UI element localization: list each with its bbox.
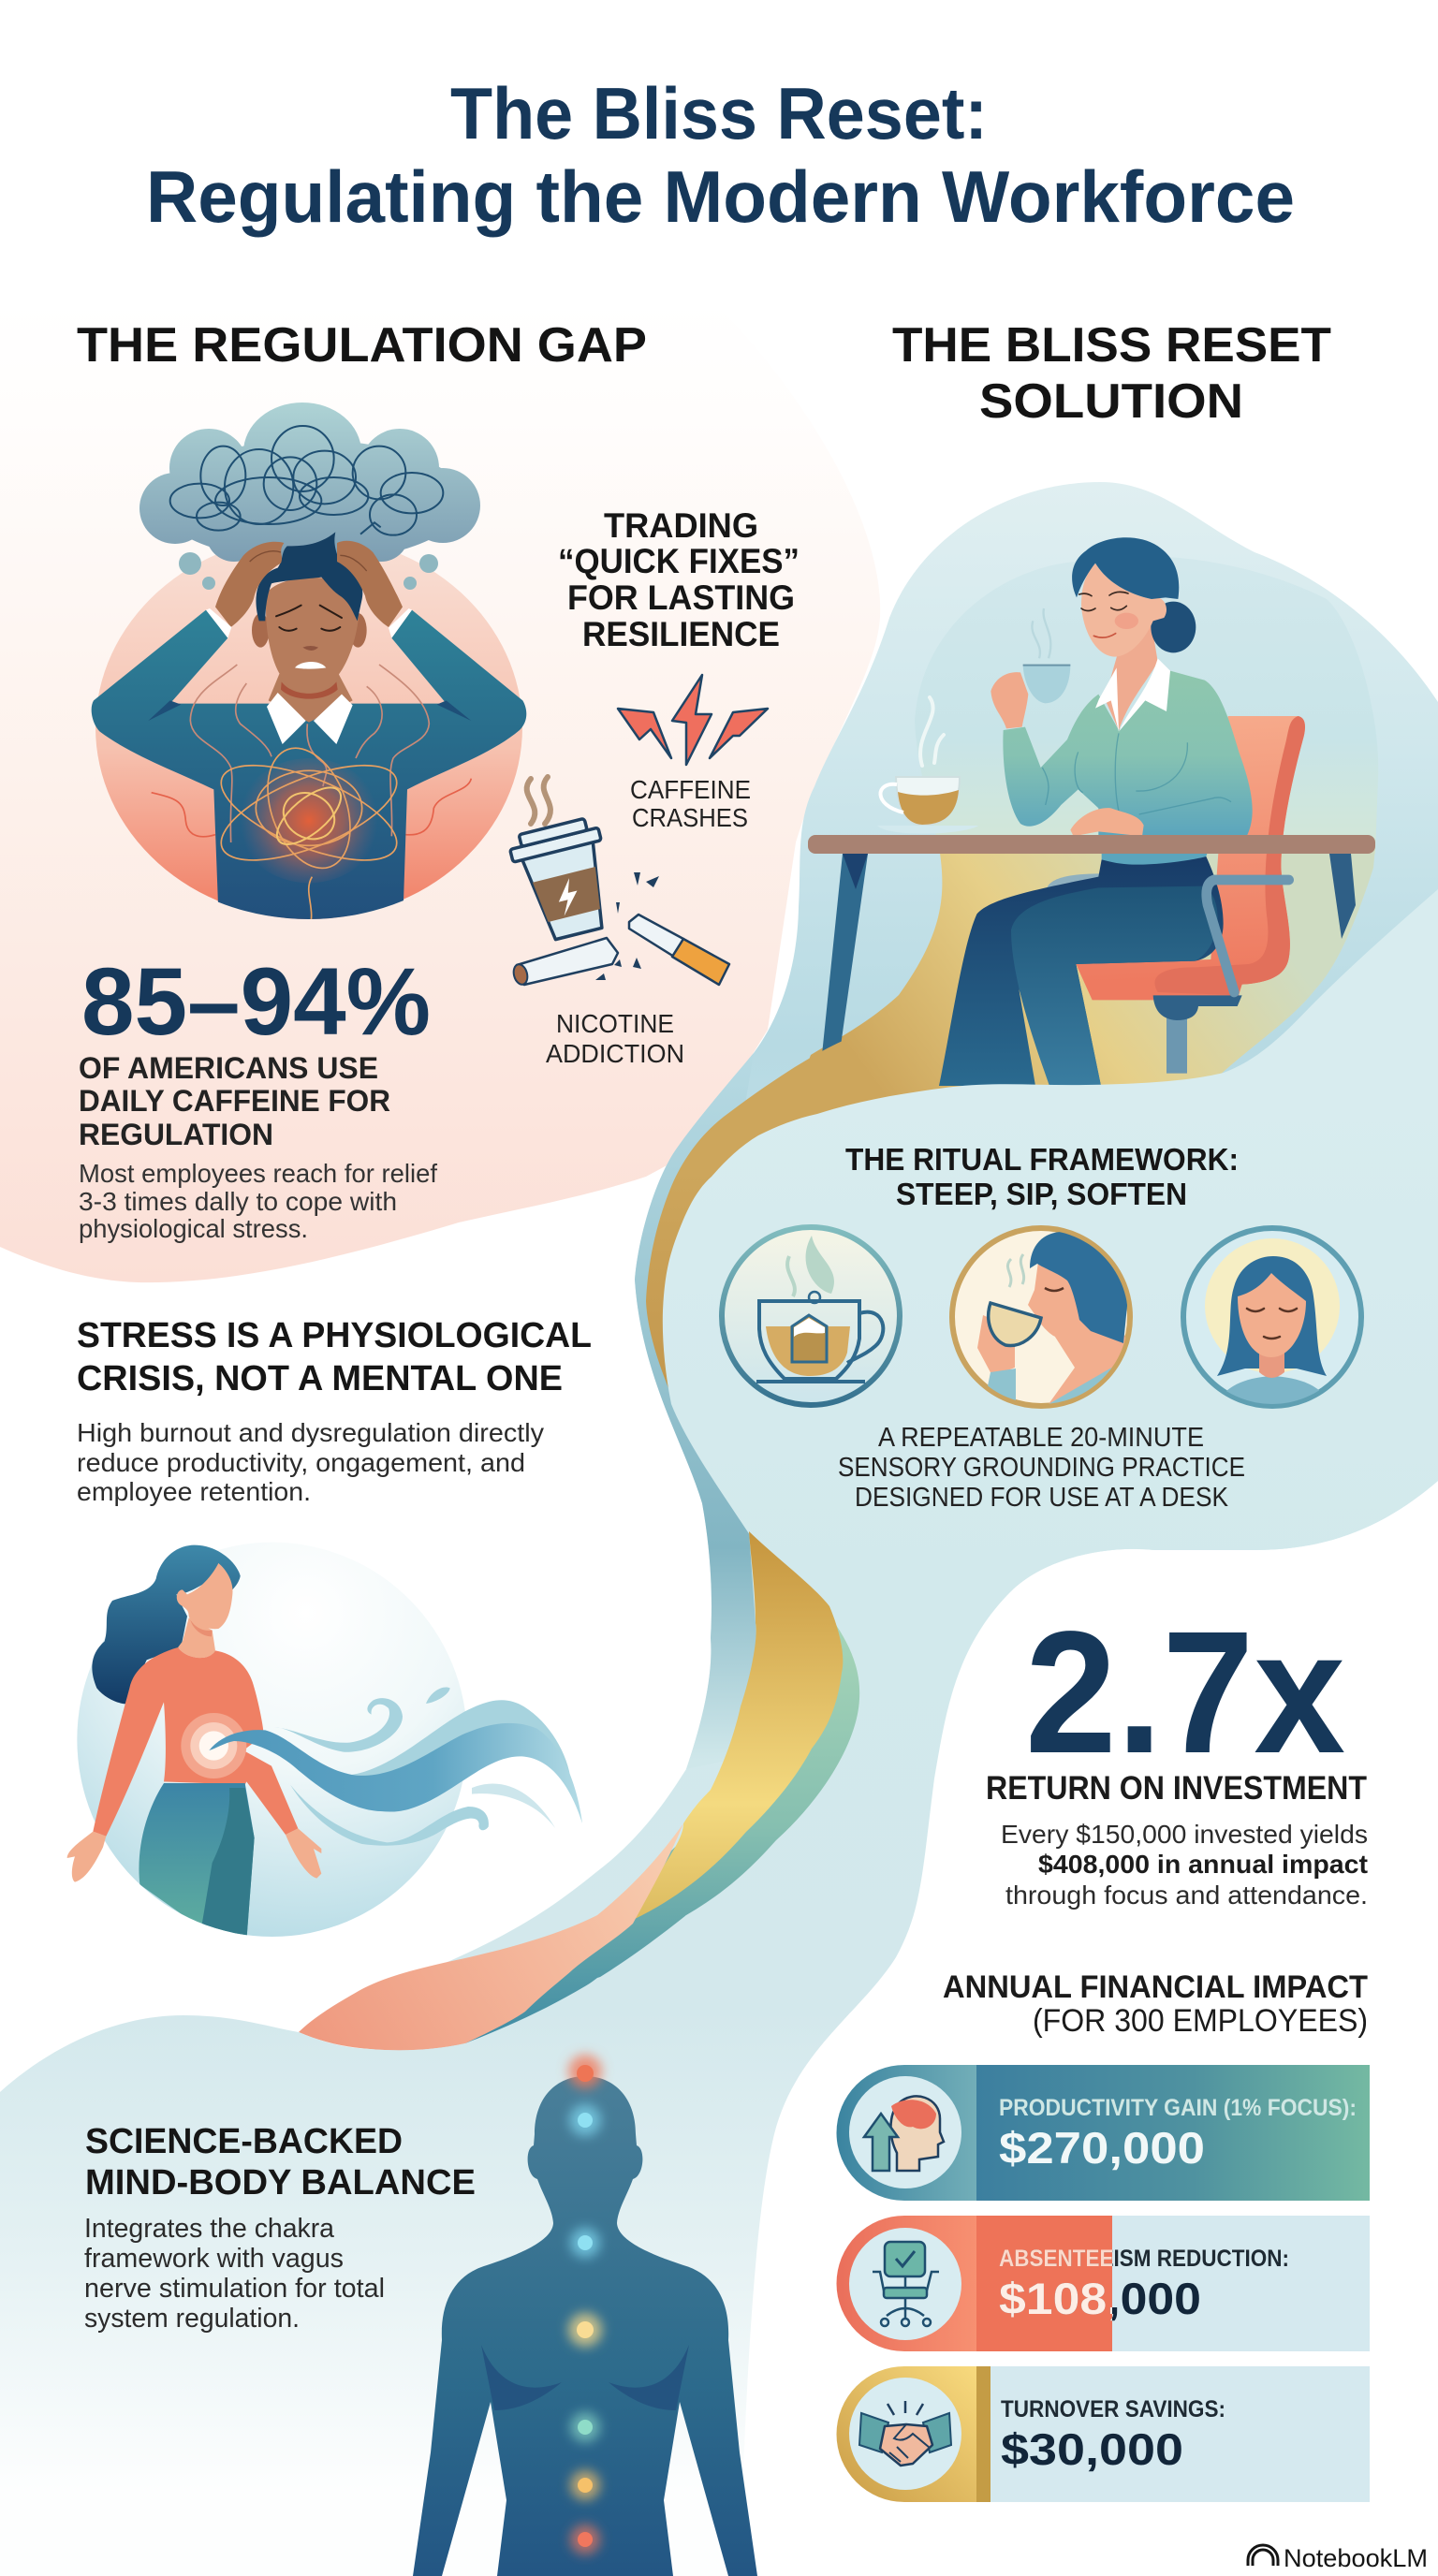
text: trading quick fixes — [558, 506, 800, 653]
body text: chakra: Integrates the chakra — [84, 2214, 335, 2244]
panel: peach regulation gap background — [0, 300, 880, 1282]
body text: chakra: nerve stimulation for total — [84, 2274, 385, 2304]
stat body text — [79, 1159, 437, 1243]
text: trading quick fixes: “QUICK FIXES” — [558, 542, 800, 580]
blouse — [1003, 671, 1253, 836]
icon: head and arrow — [849, 2076, 961, 2188]
chest shading — [481, 2345, 689, 2410]
illustration: woman enjoying tea at desk — [749, 537, 1378, 1217]
text: repeatable practice: SENSORY GROUNDING PRACTICE — [838, 1453, 1245, 1483]
body text: chakra: system regulation. — [84, 2304, 300, 2334]
title: The Bliss Reset: — [450, 72, 988, 154]
icon: sip woman profile — [952, 1228, 1133, 1413]
heading: annual financial impact: (FOR 300 EMPLOYEES) — [1033, 2003, 1368, 2039]
ribbon: gold lower — [633, 1531, 843, 1920]
neck — [1105, 624, 1158, 730]
label and value: PRODUCTIVITY GAIN (1% FOCUS): — [999, 2095, 1357, 2121]
chair — [1047, 716, 1305, 1074]
heading: annual financial impact — [943, 1969, 1368, 2039]
heading: the bliss reset solution: SOLUTION — [979, 374, 1243, 429]
facial features — [276, 606, 342, 631]
label: nicotine addiction: NICOTINE — [556, 1009, 674, 1038]
stat body text: Most employees reach for relief — [79, 1159, 437, 1188]
blouse details — [1042, 733, 1231, 814]
bar: turnover savings: $30,000 — [1001, 2424, 1183, 2474]
heading: stress is a physiological crisis: STRESS IS A PHYSIOLOGICAL — [77, 1316, 592, 1355]
panel: ritual framework background — [663, 889, 1438, 1676]
illustration: body silhouette with chakras — [413, 2055, 757, 2576]
ribbon: peach — [299, 1823, 683, 2050]
hair — [92, 1545, 241, 1704]
cloud — [139, 402, 480, 562]
hair — [1030, 1232, 1127, 1343]
held hand — [990, 672, 1028, 728]
logo: NotebookLM: NotebookLM — [1284, 2544, 1428, 2572]
chakra points — [577, 2065, 594, 2547]
face — [1081, 564, 1167, 657]
text: trading quick fixes: RESILIENCE — [582, 615, 780, 653]
illustration: woman breathing — [67, 1543, 582, 1940]
text: repeatable practice: A REPEATABLE 20-MINUTE — [878, 1423, 1204, 1453]
collar — [1095, 658, 1170, 732]
icon: soften woman portrait — [1183, 1228, 1361, 1423]
label: nicotine addiction: ADDICTION — [546, 1039, 684, 1068]
bar: absenteeism reduction: ABSENTEEISM REDUCTION: — [999, 2246, 1289, 2272]
heading: stress is a physiological crisis: CRISIS, NOT A MENTAL ONE — [77, 1359, 563, 1398]
icon: handshake — [849, 2378, 961, 2490]
river: upper gold band — [646, 1041, 843, 1488]
hair — [256, 532, 362, 621]
body text: chakra: framework with vagus — [84, 2244, 344, 2274]
desk legs — [815, 854, 1356, 1119]
heading: ritual framework: STEEP, SIP, SOFTEN — [896, 1177, 1187, 1211]
neck — [178, 1617, 215, 1658]
stat caption: DAILY CAFFEINE FOR — [79, 1084, 390, 1118]
facial details — [1079, 592, 1128, 610]
heading: stress is a physiological crisis — [77, 1316, 592, 1398]
top and arms — [93, 1647, 298, 1837]
bar: productivity gain — [837, 2065, 1370, 2201]
red lines behind — [152, 779, 471, 837]
face — [177, 1563, 233, 1629]
body text: burnout: reduce productivity, ongagement, and — [77, 1448, 525, 1477]
thought bubbles — [179, 552, 438, 590]
stat: 85-94 percent: 85–94% — [81, 948, 431, 1055]
seated woman figure — [939, 537, 1305, 1086]
body text: roi: through focus and attendance. — [1005, 1881, 1368, 1910]
heading: ritual framework — [845, 1142, 1239, 1211]
bar: absenteeism reduction — [837, 2216, 1370, 2351]
ribbon: green teal — [465, 1608, 859, 2043]
neck and shoulder — [1049, 1331, 1125, 1404]
label and value: ABSENTEEISM REDUCTION: — [999, 2246, 1289, 2272]
hair — [1072, 537, 1179, 599]
scene background blob — [915, 556, 1378, 854]
icon: steep tea cup — [722, 1227, 900, 1405]
hand and sleeve — [977, 1315, 1015, 1376]
icon: caffeine crash bolts — [618, 675, 768, 765]
steam — [1032, 608, 1050, 658]
silhouette — [413, 2076, 757, 2576]
background circle — [77, 1543, 467, 1937]
label: nicotine addiction — [546, 1009, 684, 1068]
cuffs — [206, 608, 412, 638]
icon: broken cigarette — [511, 872, 729, 986]
stat caption: OF AMERICANS USE — [79, 1051, 378, 1085]
blouse below desk — [1102, 852, 1208, 865]
label: caffeine crashes: CRASHES — [632, 803, 748, 832]
ears — [252, 613, 270, 648]
bun — [1151, 602, 1196, 652]
text: repeatable practice: DESIGNED FOR USE AT A DESK — [855, 1483, 1229, 1513]
desk hand — [1070, 808, 1144, 836]
body text: roi: $408,000 in annual impact — [1038, 1850, 1368, 1879]
heading: return on investment: RETURN ON INVESTMENT — [986, 1770, 1367, 1807]
heading: annual financial impact: ANNUAL FINANCIAL IMPACT — [943, 1969, 1368, 2005]
heading: ritual framework: THE RITUAL FRAMEWORK: — [845, 1142, 1239, 1177]
collar — [267, 693, 353, 744]
label: caffeine crashes — [630, 775, 751, 832]
body text: burnout: employee retention. — [77, 1477, 311, 1506]
title — [146, 72, 1295, 238]
bar: absenteeism reduction: $108,000 — [999, 2274, 1201, 2323]
steam from desk cup — [920, 697, 944, 766]
background circle — [95, 535, 522, 919]
hands — [67, 1832, 106, 1882]
body text: roi: Every $150,000 invested yields — [1001, 1820, 1368, 1849]
near leg — [1011, 886, 1218, 1086]
stat body text: 3-3 times dally to cope with — [79, 1187, 397, 1216]
heading: the regulation gap: THE REGULATION GAP — [77, 318, 647, 373]
icon: coffee cup — [507, 777, 622, 944]
heading: science backed balance: SCIENCE-BACKED — [85, 2122, 403, 2161]
body text: burnout — [77, 1418, 544, 1506]
stat caption: REGULATION — [79, 1118, 273, 1151]
nerves — [190, 665, 429, 842]
heading: science backed balance — [85, 2122, 476, 2203]
title: Regulating the Modern Workforce — [146, 155, 1295, 238]
illustration: stressed man with tangled thoughts — [92, 402, 526, 929]
breath waves — [209, 1687, 582, 1846]
sleeve creases — [148, 700, 471, 721]
leggings — [139, 1783, 255, 1940]
text: trading quick fixes: FOR LASTING — [567, 578, 795, 617]
heading: the bliss reset solution: THE BLISS RESET — [892, 318, 1331, 373]
cup held — [1023, 665, 1070, 703]
stat body text: physiological stress. — [79, 1214, 308, 1243]
label: caffeine crashes: CAFFEINE — [630, 775, 751, 804]
bar: turnover savings — [837, 2366, 1370, 2502]
stat: 2.7x: 2.7x — [1025, 1596, 1345, 1790]
heading: the bliss reset solution — [892, 318, 1331, 429]
chakra glows — [568, 2055, 602, 2554]
gold hill — [749, 847, 1375, 1217]
teacup on desk — [877, 777, 978, 834]
tangled chest — [220, 747, 398, 919]
text: trading quick fixes: TRADING — [604, 506, 758, 545]
heading: science backed balance: MIND-BODY BALANCE — [85, 2163, 476, 2203]
body text: roi — [1001, 1820, 1368, 1910]
icon: office chair — [849, 2228, 961, 2340]
belly glow — [181, 1713, 246, 1778]
bar: productivity gain: $270,000 — [999, 2123, 1205, 2173]
bar: absenteeism reduction: $108,000 — [999, 2274, 1201, 2323]
face — [1028, 1264, 1086, 1337]
stat caption — [79, 1051, 390, 1151]
tangled scribble — [170, 426, 443, 535]
armrest — [1207, 880, 1289, 992]
face — [266, 578, 360, 674]
body text: burnout: High burnout and dysregulation directly — [77, 1418, 544, 1447]
chest glow — [237, 758, 381, 883]
panel: teal solution background flow — [370, 482, 1438, 2134]
hands — [215, 542, 284, 627]
man figure — [92, 532, 526, 929]
text: repeatable practice — [838, 1423, 1245, 1513]
neck — [269, 674, 353, 723]
sweater and sleeves — [92, 610, 526, 929]
label and value: TURNOVER SAVINGS: — [1001, 2396, 1225, 2422]
trousers — [939, 856, 1224, 1086]
river: outer teal strip — [635, 1053, 756, 1769]
panel: bottom mind-body background — [0, 1915, 774, 2576]
body text: chakra — [84, 2214, 385, 2334]
desk — [808, 835, 1375, 854]
